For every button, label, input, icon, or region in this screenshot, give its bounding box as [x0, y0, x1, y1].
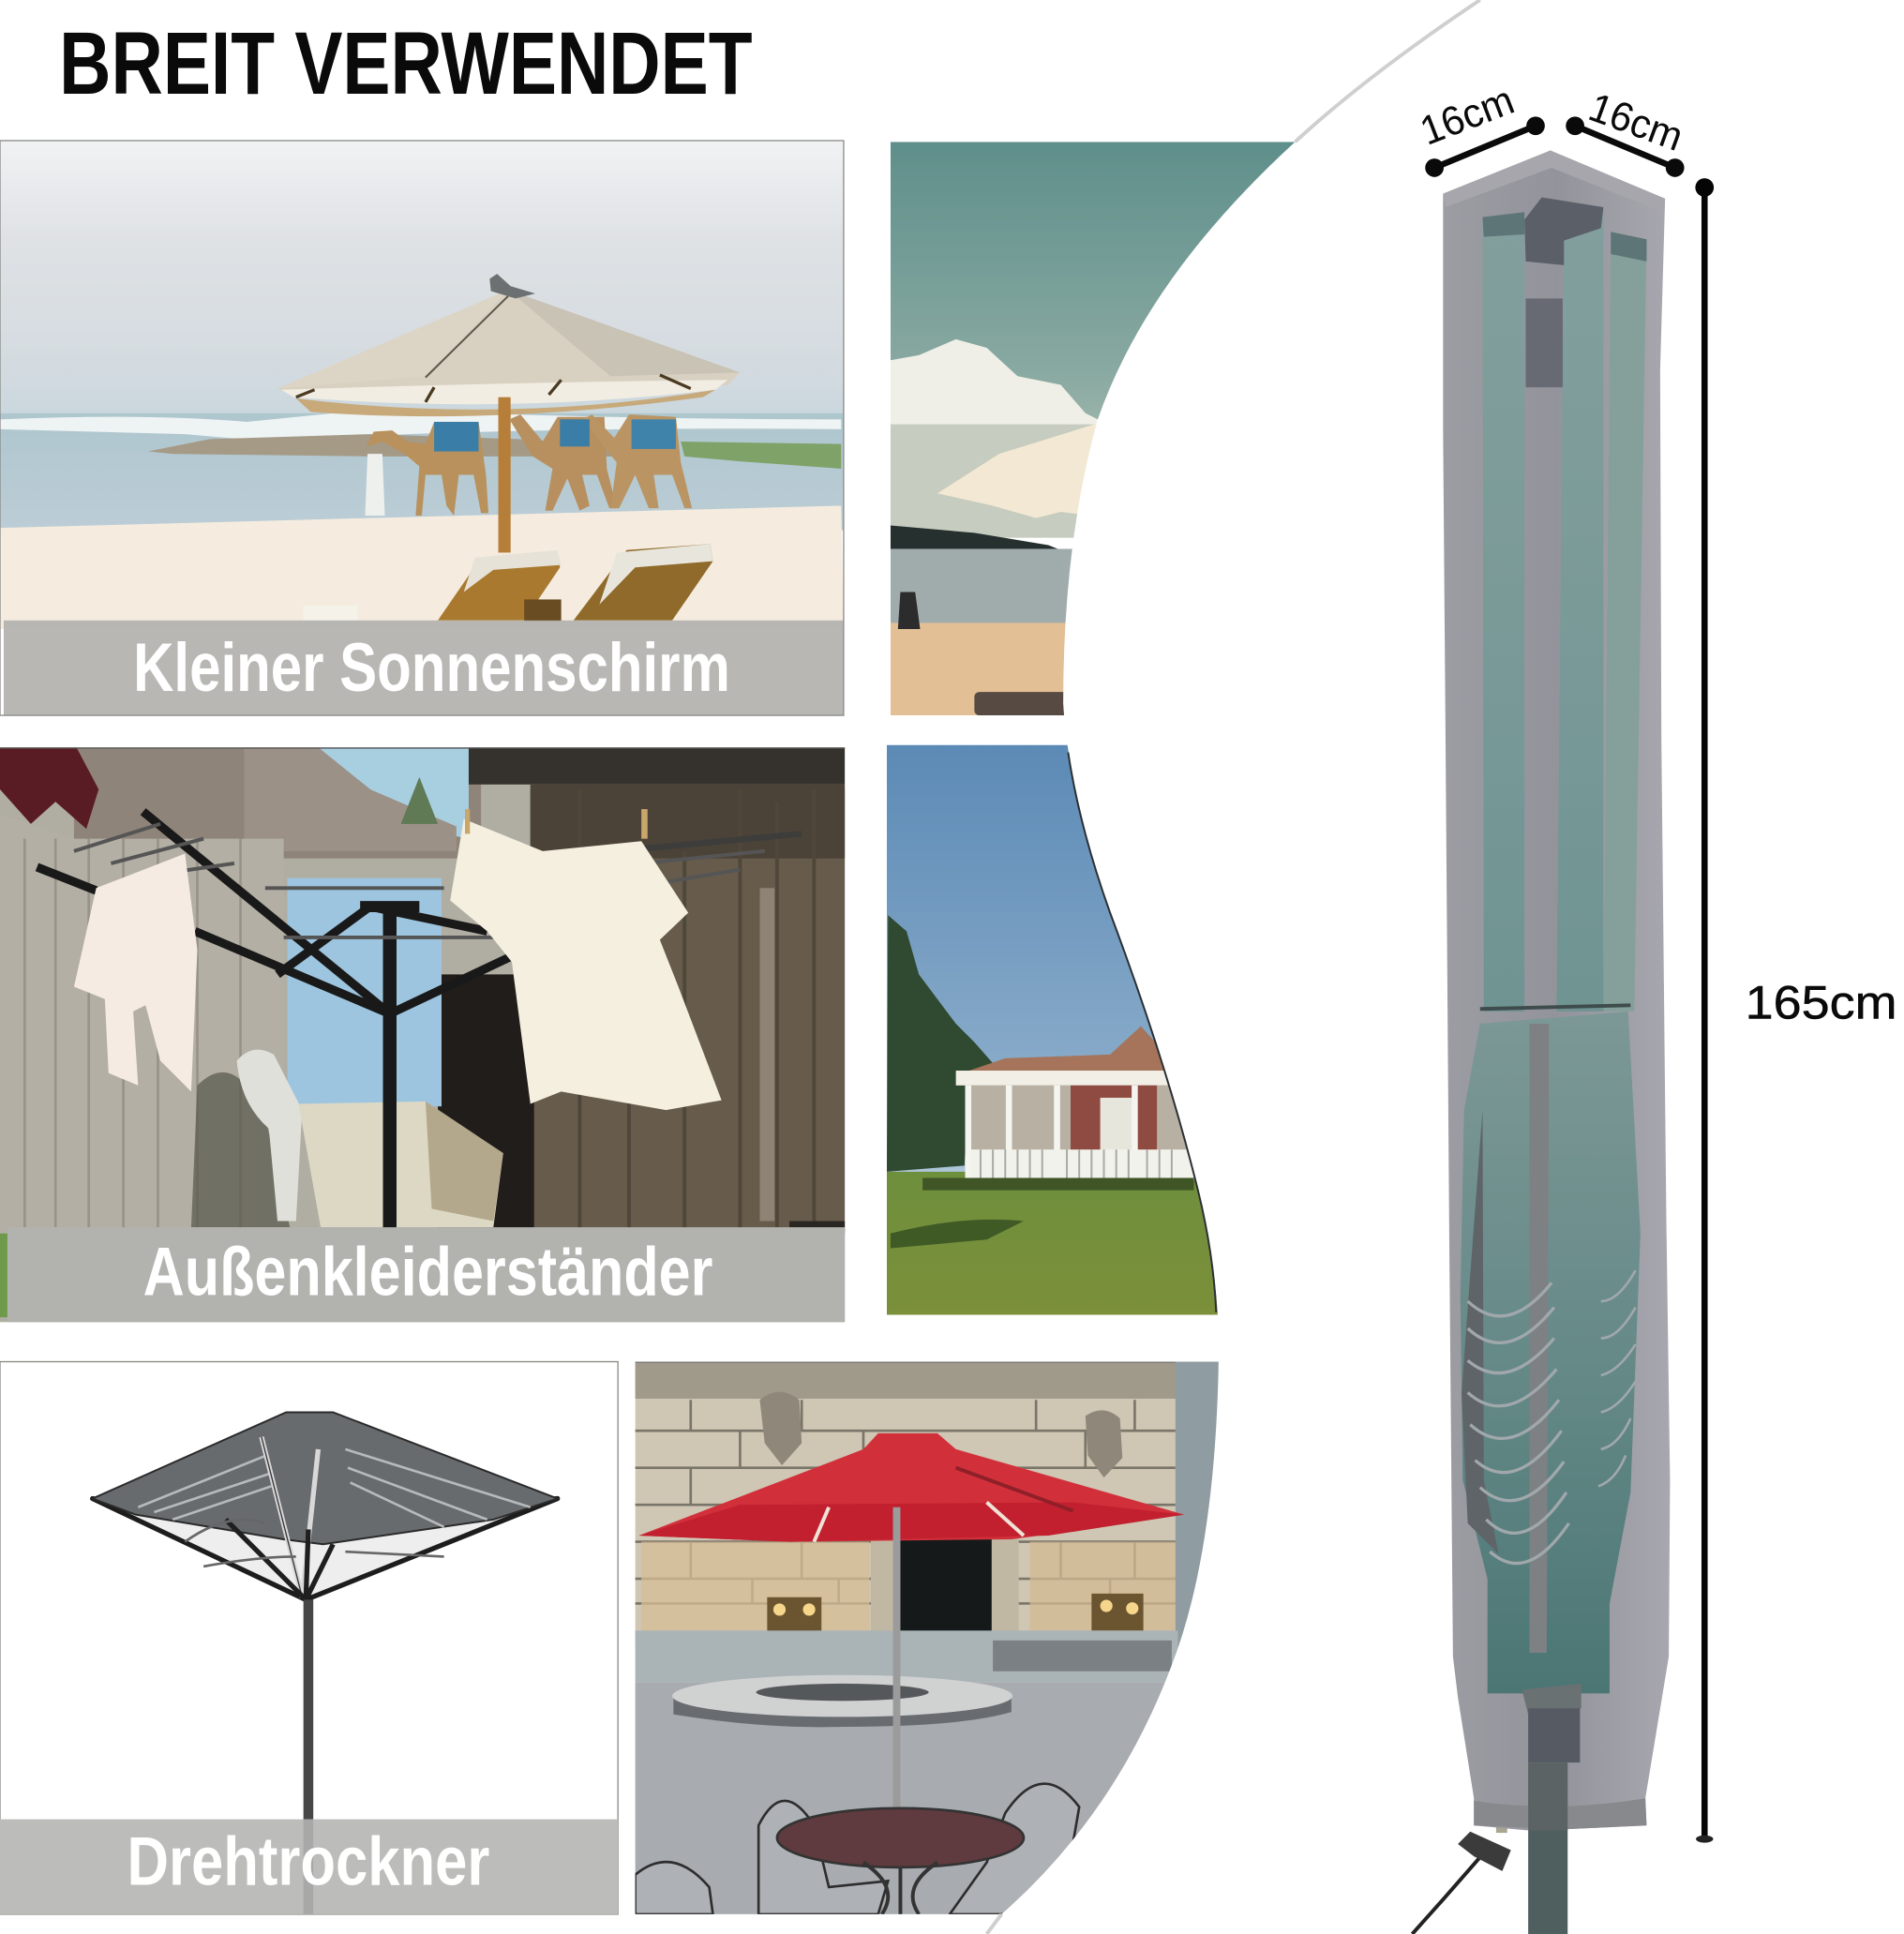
cover fabric [1443, 151, 1670, 1830]
sun loungers [438, 544, 712, 622]
caption bar: Außenkleiderständer: Außenkleiderständer [143, 1232, 712, 1310]
dimension: left width 16cm: 16cm [1415, 78, 1521, 155]
rotary dryer frame [37, 812, 802, 1234]
dimension: left width 16cm [1415, 78, 1545, 177]
panel: outdoor clothes dryer [0, 747, 847, 1322]
parasol [277, 274, 740, 552]
dryer illustration [93, 1412, 558, 1914]
curved white panel [987, 0, 1904, 1934]
caption bar: Kleiner Sonnenschirm [4, 621, 844, 715]
blue towel [288, 878, 442, 1106]
dimension: right width 16cm [1566, 85, 1688, 177]
caption bar: Drehtrockner: Drehtrockner [127, 1822, 489, 1899]
pole below cover [1528, 1702, 1567, 1934]
shed wall [469, 747, 845, 1234]
caption bar: Drehtrockner [0, 1820, 618, 1914]
wall ornaments [759, 1392, 1122, 1477]
lamps [767, 1594, 1144, 1632]
title: BREIT VERWENDET [59, 14, 753, 113]
grass sliver [0, 1234, 7, 1317]
height label: 165cm [1746, 977, 1897, 1029]
panel: house with lawn [887, 745, 1232, 1315]
caption bar: Kleiner Sonnenschirm: Kleiner Sonnenschirm [133, 628, 730, 706]
caption bar: Außenkleiderständer [7, 1227, 847, 1322]
panel: red parasol at plaza [636, 1362, 1220, 1917]
autumn leaves [0, 747, 98, 829]
red parasol [639, 1433, 1184, 1828]
house [922, 1027, 1196, 1191]
panel: rotary dryer product [0, 1362, 618, 1914]
dimension: right width 16cm: 16cm [1583, 85, 1688, 160]
hanging garment left [74, 853, 198, 1091]
drawstring toggle and cord [1412, 1798, 1511, 1934]
table and chairs [636, 1784, 1079, 1914]
dimension: height rod [1695, 178, 1714, 1843]
garden chair [191, 1050, 503, 1227]
cover hem [1474, 1798, 1646, 1829]
fountain [672, 1675, 1012, 1727]
panel: small parasol on beach [0, 141, 844, 715]
door [871, 1536, 1019, 1634]
protective cover product [1412, 151, 1670, 1934]
panel: parasol at seaside [891, 142, 1310, 715]
folded dryer arms [1461, 198, 1646, 1762]
tree [887, 915, 1001, 1172]
hanging shirt [450, 819, 722, 1110]
plaza [636, 1630, 1177, 1683]
column [1176, 1361, 1219, 1648]
camels [365, 414, 692, 516]
